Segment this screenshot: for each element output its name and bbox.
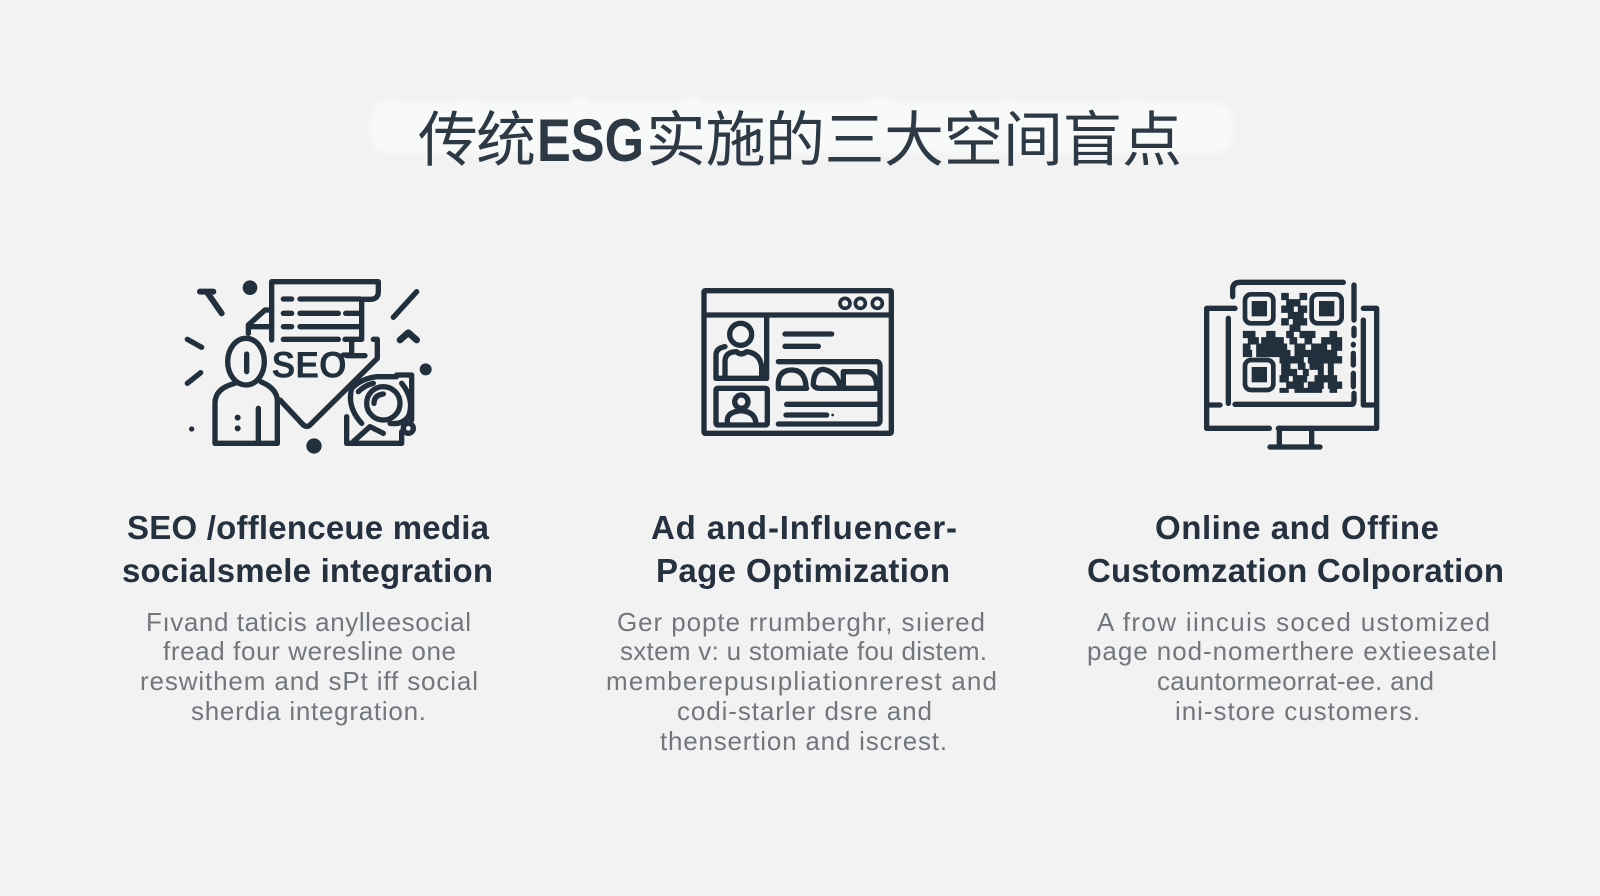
heading: column two: Page Optimization [656,552,950,589]
title: 传统 [418,107,536,174]
text: column one description: fread four weresline one [163,636,456,666]
text: column two description: thensertion and iscrest. [660,726,947,756]
text: column three description: ini-store customers. [1175,696,1420,726]
text: column two description: sxtem v: u stomiate fou distem. [620,636,987,666]
heading: column two: Ad and-Influencer- [651,509,957,546]
icon: browser window with profiles [704,291,891,433]
heading: column one: SEO /offlenceue media [127,509,490,546]
text: column three description: page nod-nomerthere extieesatel [1087,636,1497,666]
text: column one description [140,607,478,726]
text: column two description: Ger popte rrumberghr, sıiered [617,607,985,637]
text: column three description: A frow iincuis soced ustomized [1097,607,1490,637]
heading: column one: socialsmele integration [122,552,493,589]
heading: column one [122,509,493,589]
heading: column three [1087,509,1504,589]
text: column three description: cauntormeorrat-ee. and [1157,666,1434,696]
title: 实施的三大空间盲点 [646,107,1182,174]
text: column one description: Fıvand taticis anylleesocial [146,607,471,637]
panel: SEO and social media integration [122,280,493,726]
heading: column three: Customzation Colporation [1087,552,1504,589]
panel: online and offline customization [1087,282,1504,726]
title backdrop [370,96,1233,153]
panel: ad and influencer page optimization [606,291,997,756]
text: column one description: sherdia integration. [191,696,426,726]
text: column one description: reswithem and sPt iff social [140,666,478,696]
text: column three description [1087,607,1497,726]
text: column two description: codi-starler dsre and [677,696,932,726]
icon: SEO person, document and gear: SEO [272,343,347,385]
heading: column two [651,509,957,589]
icon: SEO person, document and gear [187,280,432,454]
heading: column three: Online and Offine [1155,509,1439,546]
icon: monitor with QR code [1207,282,1377,447]
text: column two description: memberepusıpliationrerest and [606,666,997,696]
title: ESG [537,107,644,174]
text: column two description [606,607,997,756]
